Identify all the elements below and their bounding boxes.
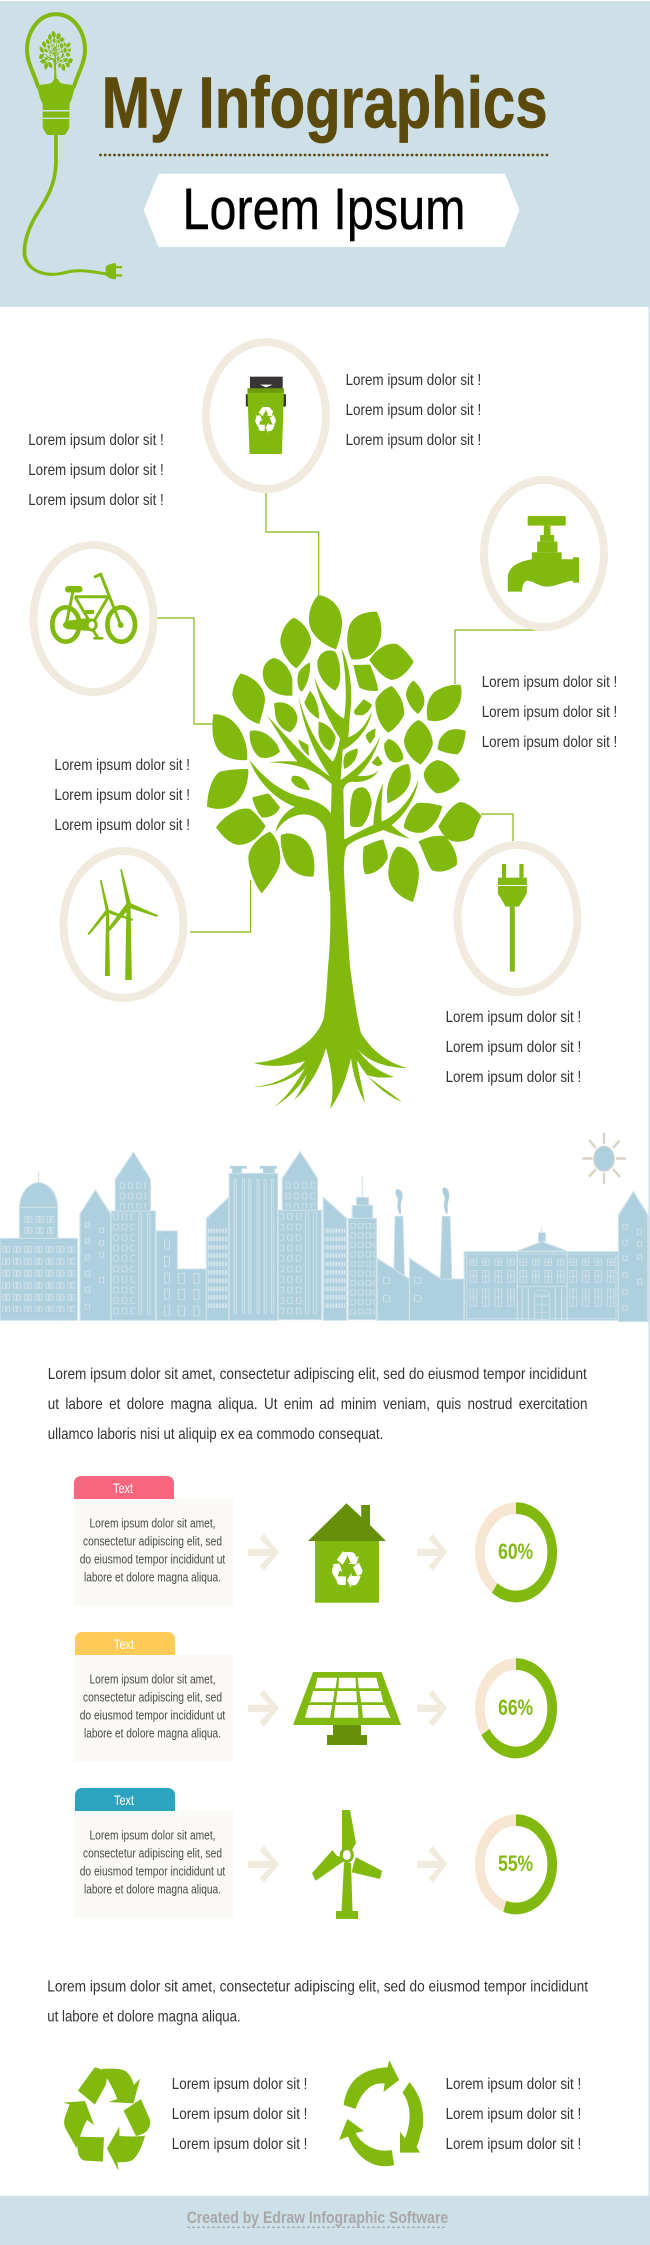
text: top left: Lorem ipsum dolor sit ! (28, 432, 164, 449)
icon: light bulb with tree and cord (24, 14, 122, 279)
icon: recycling symbol (63, 2068, 150, 2171)
tab: yellow (75, 1632, 175, 1655)
tab: blue: Text (114, 1792, 134, 1808)
text: top left (28, 432, 164, 509)
text panel (74, 1811, 233, 1918)
icon: solar panel (293, 1672, 401, 1745)
text: bottom left: Lorem ipsum dolor sit ! (172, 2106, 307, 2123)
text: lower right (446, 1009, 581, 1086)
text panel: consectetur adipiscing elit, sed (83, 1534, 222, 1549)
progress ring: 60%: 60% (498, 1539, 533, 1564)
header panel (0, 1, 650, 307)
text panel (74, 1499, 233, 1606)
text: bottom right: Lorem ipsum dolor sit ! (446, 2076, 581, 2093)
footer: Created by Edraw Infographic Software (187, 2208, 448, 2227)
icon circle: recycling bin (206, 342, 326, 489)
paragraph: intro: ut labore et dolore magna aliqua. Ut enim ad minim veniam, quis nostrud exercitation (48, 1396, 587, 1413)
icon circle: plug (458, 845, 578, 992)
text panel (74, 1655, 233, 1762)
text: top right: Lorem ipsum dolor sit ! (346, 402, 481, 419)
text: top right: Lorem ipsum dolor sit ! (346, 372, 481, 389)
icon circle: faucet (484, 480, 604, 627)
text panel: do eiusmod tempor incididunt ut (80, 1708, 226, 1723)
arrow (417, 1846, 447, 1883)
text: top right: Lorem ipsum dolor sit ! (346, 432, 481, 449)
paragraph: closing: ut labore et dolore magna aliqua. (47, 2009, 241, 2026)
text: bottom left: Lorem ipsum dolor sit ! (172, 2136, 307, 2153)
text: bottom left (172, 2076, 307, 2153)
city skyline (0, 1152, 648, 1322)
text: right middle: Lorem ipsum dolor sit ! (482, 704, 617, 721)
paragraph: intro (48, 1366, 587, 1443)
tab: pink (74, 1476, 174, 1499)
icon circle: wind turbines (64, 851, 184, 998)
tab: blue (75, 1788, 175, 1811)
text: lower right: Lorem ipsum dolor sit ! (446, 1009, 581, 1026)
text: right middle: Lorem ipsum dolor sit ! (482, 674, 617, 691)
page border (648, 300, 650, 2200)
text: bottom right (446, 2076, 581, 2153)
text: right middle: Lorem ipsum dolor sit ! (482, 734, 617, 751)
text: top left: Lorem ipsum dolor sit ! (28, 492, 164, 509)
icon circle: bicycle (34, 545, 154, 692)
progress ring: 55%: 55% (498, 1851, 533, 1876)
row 2: solar panel (74, 1632, 552, 1762)
text panel: do eiusmod tempor incididunt ut (80, 1864, 226, 1879)
text panel: Lorem ipsum dolor sit amet, (90, 1672, 216, 1687)
text: top right (346, 372, 481, 449)
text panel: consectetur adipiscing elit, sed (83, 1846, 222, 1861)
icon: circular arrows (339, 2060, 423, 2166)
icon: wind turbine (312, 1810, 382, 1919)
progress ring: 60% (480, 1508, 552, 1596)
icon: recycling house (308, 1503, 386, 1603)
row 1: house (74, 1476, 552, 1606)
text: left middle: Lorem ipsum dolor sit ! (54, 817, 190, 834)
progress ring: 66% (480, 1664, 552, 1752)
arrow (248, 1846, 279, 1883)
footer (0, 2196, 650, 2245)
text panel: labore et dolore magna aliqua. (84, 1570, 221, 1585)
text panel: do eiusmod tempor incididunt ut (80, 1552, 226, 1567)
paragraph: intro: ullamco laboris nisi ut aliquip ex ea commodo consequat. (48, 1426, 383, 1443)
row 3: wind turbine (74, 1788, 552, 1919)
subtitle banner: Lorem Ipsum (182, 177, 466, 242)
title: My Infographics (102, 64, 548, 144)
text panel: labore et dolore magna aliqua. (84, 1726, 221, 1741)
arrow (417, 1690, 447, 1727)
text: right middle (482, 674, 617, 751)
text: bottom right: Lorem ipsum dolor sit ! (446, 2136, 581, 2153)
progress ring: 66%: 66% (498, 1695, 533, 1720)
text panel: consectetur adipiscing elit, sed (83, 1690, 222, 1705)
paragraph: closing (47, 1979, 588, 2026)
text: left middle: Lorem ipsum dolor sit ! (54, 787, 190, 804)
text panel: labore et dolore magna aliqua. (84, 1882, 221, 1897)
text: left middle: Lorem ipsum dolor sit ! (54, 757, 190, 774)
arrow (248, 1534, 279, 1571)
text: left middle (54, 757, 190, 834)
text: lower right: Lorem ipsum dolor sit ! (446, 1039, 581, 1056)
text panel: Lorem ipsum dolor sit amet, (90, 1516, 216, 1531)
connector lines (157, 493, 544, 932)
tab: yellow: Text (114, 1636, 134, 1652)
progress ring: 55% (480, 1820, 552, 1908)
tab: pink: Text (113, 1480, 133, 1496)
arrow (248, 1690, 279, 1727)
arrow (417, 1534, 447, 1571)
tree (207, 595, 482, 1109)
text: lower right: Lorem ipsum dolor sit ! (446, 1069, 581, 1086)
icon: sun (583, 1133, 626, 1184)
text: bottom right: Lorem ipsum dolor sit ! (446, 2106, 581, 2123)
text: bottom left: Lorem ipsum dolor sit ! (172, 2076, 307, 2093)
text panel: Lorem ipsum dolor sit amet, (90, 1828, 216, 1843)
text: top left: Lorem ipsum dolor sit ! (28, 462, 164, 479)
